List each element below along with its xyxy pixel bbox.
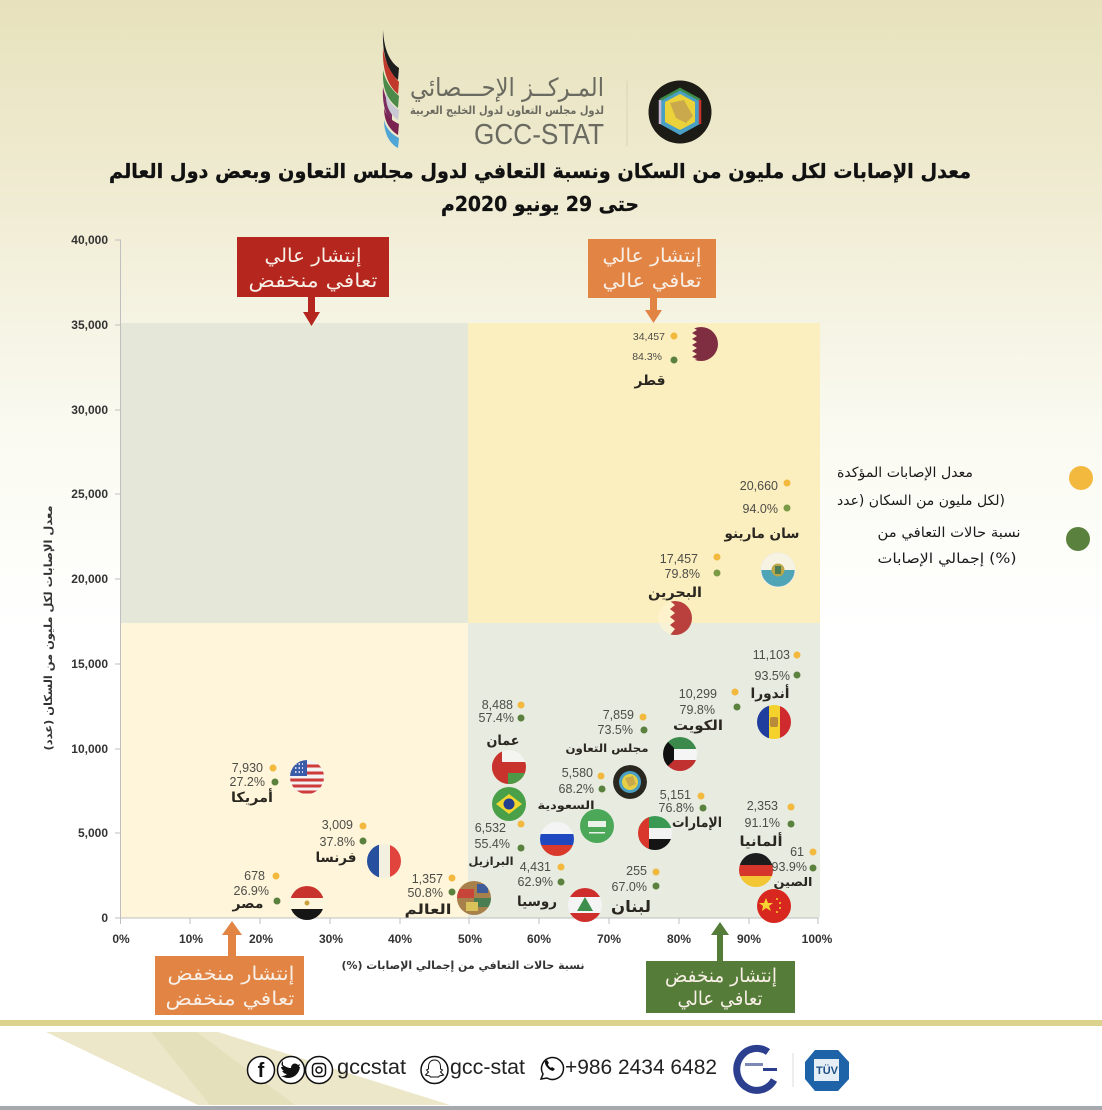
callout: high spread high recovery	[588, 239, 716, 323]
point: China	[757, 845, 816, 923]
point: Qatar: 34,457	[633, 331, 665, 343]
point: Brazil: البرازيل	[468, 855, 514, 868]
x axis labels: 40%	[388, 932, 412, 946]
point: Bahrain: البحرين	[648, 585, 702, 601]
social icons and handles: gccstat	[337, 1056, 406, 1079]
point: France	[316, 818, 401, 878]
point: World: 1,357	[412, 872, 443, 886]
point: Andorra: 11,103	[753, 648, 790, 662]
point: Saudi Arabia: السعودية	[538, 799, 594, 812]
callout: low spread high recovery: إنتشار منخفض	[665, 965, 777, 988]
point: GCC: 5,580	[562, 766, 593, 780]
point: GCC: 7,859	[603, 708, 634, 722]
y axis labels: 30,000	[71, 403, 108, 417]
point: Russia: 62.9%	[518, 875, 553, 889]
point: Kuwait	[663, 687, 740, 771]
callout: low spread low recovery	[155, 921, 304, 1015]
x axis labels	[112, 932, 833, 946]
x axis labels: 50%	[458, 932, 482, 946]
point: Bahrain: 79.8%	[665, 567, 700, 581]
point: Germany: 91.1%	[745, 816, 780, 830]
logo Arabic name: المـركــز الإحـــصائي	[410, 73, 604, 102]
legend: (لكل مليون من السكان (عدد	[837, 493, 1005, 509]
callout: high spread low recovery: إنتشار عالي	[264, 245, 362, 268]
legend: نسبة حالات التعافي من	[878, 525, 1020, 541]
callout: low spread low recovery: إنتشار منخفض	[168, 963, 294, 986]
y axis labels: 5,000	[78, 826, 108, 840]
point: Qatar: 84.3%	[632, 351, 662, 363]
icon: whatsapp phone	[545, 1060, 555, 1071]
point: Germany: 2,353	[747, 799, 778, 813]
point: Kuwait: الكويت	[673, 718, 723, 734]
point: Andorra	[750, 648, 800, 739]
point: Bahrain: 17,457	[660, 552, 698, 566]
point: Lebanon: 67.0%	[612, 880, 647, 894]
legend: (%) إجمالي الإصابات	[878, 551, 1016, 567]
logo GCC-STAT: GCC-STAT	[474, 119, 604, 151]
certification logos	[737, 1048, 849, 1091]
logo: GCC-Stat	[383, 30, 712, 151]
point: China: الصين	[774, 875, 812, 889]
point: Brazil: 55.4%	[475, 837, 510, 851]
icon: instagram	[312, 1064, 326, 1076]
point: USA: 27.2%	[230, 775, 265, 789]
point: Oman: 8,488	[482, 698, 513, 712]
y axis labels: 0	[101, 911, 108, 925]
point: Egypt: 678	[244, 869, 265, 883]
icon: twitter	[281, 1061, 300, 1078]
logo Arabic subtitle: لدول مجلس التعاون لدول الخليج العربية	[410, 104, 604, 117]
point: UAE: 5,151	[660, 788, 691, 802]
point: Brazil	[468, 787, 526, 868]
callout: high spread low recovery: تعافي منخفض	[248, 270, 378, 292]
point: Egypt: مصر	[232, 896, 264, 912]
callout: low spread high recovery	[646, 922, 795, 1013]
x axis labels: 90%	[737, 932, 761, 946]
footer band	[0, 1020, 1102, 1110]
y axis title: معدل الإصابات لكل مليون من السكان (عدد)	[42, 506, 55, 750]
point: Saudi Arabia	[538, 799, 614, 843]
point: China: 61	[790, 845, 804, 859]
icon: snapchat	[426, 1060, 444, 1077]
y axis labels: 40,000	[71, 233, 108, 247]
legend	[837, 465, 1093, 567]
y axis labels: 20,000	[71, 572, 108, 586]
point: GCC: 73.5%	[598, 723, 633, 737]
certification logos: TÜV	[816, 1064, 839, 1077]
axes	[115, 240, 818, 924]
point: UAE: الإمارات	[672, 815, 722, 831]
point: USA	[230, 760, 324, 806]
point: Qatar: قطر	[634, 373, 666, 389]
callout: high spread high recovery: إنتشار عالي	[602, 245, 702, 268]
point: GCC: مجلس التعاون	[566, 742, 648, 755]
callout: low spread low recovery: تعافي منخفض	[166, 988, 294, 1010]
y axis labels: 35,000	[71, 318, 108, 332]
point: UAE: 76.8%	[659, 801, 694, 815]
logo ribbon	[383, 30, 399, 148]
point: GCC	[559, 708, 648, 799]
point: Russia: 4,431	[520, 860, 551, 874]
quadrant backgrounds	[121, 323, 820, 918]
point: San Marino: 94.0%	[743, 502, 778, 516]
point: Oman: 57.4%	[479, 711, 514, 725]
x axis labels: 100%	[802, 932, 833, 946]
point: World: العالم	[404, 902, 452, 918]
social icons and handles	[248, 1056, 717, 1084]
point: Andorra: 93.5%	[755, 669, 790, 683]
point: Andorra: أندورا	[750, 684, 790, 702]
x axis labels: 70%	[597, 932, 621, 946]
point: Russia	[517, 822, 574, 910]
icon: facebook: f	[258, 1060, 265, 1082]
point: Bahrain	[648, 552, 720, 635]
point: Kuwait: 10,299	[679, 687, 717, 701]
point: San Marino	[724, 479, 800, 587]
point: France: 37.8%	[320, 835, 355, 849]
point: GCC: 68.2%	[559, 782, 594, 796]
title: معدل الإصابات لكل مليون من السكان ونسبة التعافي لدول مجلس التعاون وبعض دول العالم	[109, 159, 971, 184]
point: San Marino: 20,660	[740, 479, 778, 493]
point: France: 3,009	[322, 818, 353, 832]
point: Egypt	[232, 869, 324, 920]
title	[109, 159, 971, 216]
point: Lebanon	[568, 864, 660, 922]
point: Egypt: 26.9%	[234, 884, 269, 898]
legend: معدل الإصابات المؤكدة	[837, 465, 973, 481]
callout: low spread high recovery: تعافي عالي	[678, 988, 762, 1010]
callout: high spread low recovery	[237, 237, 389, 326]
y axis labels: 25,000	[71, 487, 108, 501]
x axis labels: 20%	[249, 932, 273, 946]
y axis labels: 15,000	[71, 657, 108, 671]
point: Oman	[479, 698, 526, 784]
title: حتى 29 يونيو 2020م	[441, 192, 639, 216]
point: Oman: عمان	[486, 733, 520, 749]
x axis title: نسبة حالات التعافي من إجمالي الإصابات (%)	[342, 959, 584, 972]
point: Lebanon: لبنان	[611, 897, 651, 916]
point: Germany: ألمانيا	[740, 832, 782, 850]
callout: high spread high recovery: تعافي عالي	[602, 270, 702, 292]
point: UAE	[638, 788, 722, 850]
x axis labels: 80%	[667, 932, 691, 946]
social icons and handles: gcc-stat	[450, 1056, 525, 1079]
point: Lebanon: 255	[626, 864, 647, 878]
point: San Marino: سان مارينو	[724, 526, 800, 542]
point: Kuwait: 79.8%	[680, 703, 715, 717]
point: USA: 7,930	[232, 761, 263, 775]
x axis labels: 60%	[527, 932, 551, 946]
y axis labels: 10,000	[71, 742, 108, 756]
logo emblem	[648, 80, 712, 144]
point: Germany	[739, 799, 794, 887]
x axis labels: 10%	[179, 932, 203, 946]
social icons and handles: +986 2434 6482	[565, 1056, 717, 1079]
point: China: 93.9%	[772, 860, 807, 874]
point: World: 50.8%	[408, 886, 443, 900]
y axis labels	[71, 233, 108, 925]
point: World	[404, 872, 491, 918]
point: Brazil: 6,532	[475, 821, 506, 835]
point: Russia: روسيا	[517, 894, 557, 910]
x axis labels: 0%	[112, 932, 130, 946]
point: USA: أمريكا	[231, 788, 273, 806]
point: France: فرنسا	[316, 850, 356, 866]
point: Qatar	[632, 327, 718, 389]
x axis labels: 30%	[319, 932, 343, 946]
